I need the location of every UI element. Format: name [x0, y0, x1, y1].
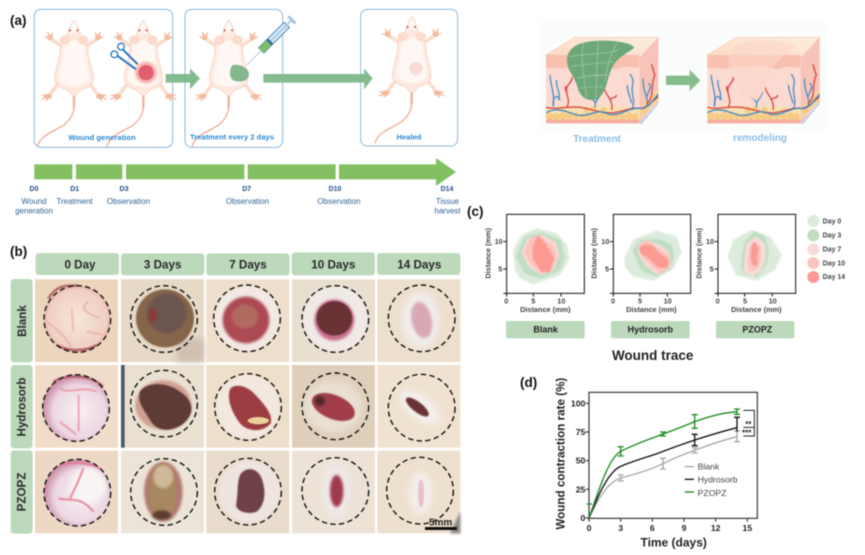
icon: scissors — [111, 43, 138, 69]
legend: Day 7 — [823, 246, 841, 253]
box: treatment — [185, 9, 283, 147]
timeline labels: Observation — [107, 197, 150, 206]
axis ticks and labels: 0 — [716, 296, 720, 305]
group labels — [506, 321, 794, 338]
panel b: wound photo grid — [11, 252, 460, 534]
photo: Hydrosorb 14 days — [377, 365, 460, 448]
timeline labels: Wound — [21, 197, 47, 206]
axis ticks and labels: 10 — [664, 296, 672, 305]
legend: Hydrosorb — [698, 474, 738, 484]
mouse: healed — [375, 17, 444, 143]
axis ticks and labels: 5 — [498, 264, 502, 273]
box: wound generation — [34, 9, 173, 147]
axis ticks and labels: 5 — [710, 264, 714, 273]
row headers — [11, 279, 33, 534]
timeline labels: D3 — [120, 186, 129, 193]
column headers: 3 Days — [144, 258, 181, 271]
axis ticks and labels: 10 — [706, 237, 714, 246]
dashed wound outlines — [43, 285, 455, 526]
tick labels: 3 — [618, 523, 623, 533]
column headers: 7 Days — [229, 258, 267, 271]
group labels: Blank — [533, 324, 558, 334]
tick labels: 0 — [587, 523, 592, 533]
plot: PZOPZ — [718, 214, 796, 293]
axis ticks and labels: Distance (mm) — [731, 305, 782, 314]
timeline labels: generation — [15, 206, 53, 216]
photo: PZOPZ 10 days — [292, 451, 375, 533]
axis title: x: Time (days) — [640, 536, 707, 550]
plot: Hydrosorb — [613, 214, 691, 293]
scale bar — [425, 518, 457, 530]
photo: PZOPZ 0 day — [35, 451, 118, 533]
photo: Blank 7 days — [206, 279, 289, 362]
panel label: (a): (a) — [10, 13, 26, 28]
axis ticks and labels: 10 — [557, 296, 565, 305]
axis ticks and labels: 10 — [769, 296, 777, 305]
timeline labels: Tissue — [436, 197, 460, 206]
scale bar: 5mm — [429, 518, 452, 529]
significance brackets: *** — [742, 428, 752, 437]
mouse: wounded — [107, 20, 176, 147]
skin block: treatment — [546, 37, 658, 124]
caption: healed: Healed — [397, 132, 422, 142]
axis ticks and labels: 10 — [601, 237, 609, 246]
icon: syringe — [243, 16, 296, 68]
axis ticks and labels: 5 — [605, 264, 609, 273]
caption: Wound trace: Wound trace — [612, 348, 694, 363]
axes — [586, 392, 757, 522]
mouse: intact — [37, 20, 107, 147]
arrow: to healed — [263, 68, 373, 89]
panel a right: skin blocks — [540, 20, 827, 132]
legend: Day 0 — [823, 218, 841, 225]
mouse: treated — [192, 20, 261, 147]
caption: Treatment: Treatment — [573, 134, 622, 145]
group labels: PZOPZ — [742, 324, 773, 334]
timeline labels: Observation — [317, 197, 361, 206]
background tint — [540, 20, 827, 132]
panel label: (c): (c) — [467, 204, 484, 219]
axis ticks and labels: Distance (mm) — [626, 305, 677, 314]
timeline arrow — [34, 158, 456, 186]
tick labels: 15 — [743, 523, 752, 533]
axis ticks and labels: 5 — [531, 296, 535, 305]
row headers: PZOPZ — [15, 473, 28, 511]
timeline labels: Treatment — [56, 197, 93, 206]
photo: PZOPZ 3 days — [121, 451, 204, 533]
row headers: Blank — [16, 305, 29, 337]
series: Hydrosorb — [589, 417, 740, 518]
caption: remodeling: remodeling — [733, 133, 787, 144]
caption: wound generation: Wound generation — [68, 133, 136, 142]
axis ticks and labels: 0 — [504, 296, 508, 305]
timeline labels: D10 — [329, 186, 342, 193]
column headers: 0 Day — [64, 259, 96, 272]
legend: Day 3 — [823, 233, 841, 240]
legend: Day 14 — [823, 274, 845, 281]
timeline labels: D14 — [441, 186, 454, 193]
tick labels: 12 — [711, 523, 721, 533]
column headers: 14 Days — [397, 259, 441, 272]
column headers — [36, 252, 460, 275]
axis ticks and labels: 5 — [638, 296, 642, 305]
photo: Blank 14 days — [377, 279, 460, 362]
axis ticks and labels: 5 — [743, 296, 747, 305]
series: PZOPZ — [587, 409, 740, 518]
plot: Blank — [507, 214, 584, 293]
legend — [807, 215, 845, 283]
timeline labels: D7 — [242, 186, 251, 193]
tick labels — [571, 398, 752, 533]
timeline labels: harvest — [434, 206, 461, 216]
legend — [685, 462, 738, 498]
significance brackets: ** — [745, 420, 752, 429]
axis ticks and labels: 10 — [495, 237, 503, 246]
axis ticks and labels: Distance (mm) — [520, 305, 571, 314]
row headers: Hydrosorb — [15, 378, 28, 436]
tick labels: 9 — [682, 523, 687, 533]
tick labels: 0 — [581, 513, 586, 523]
tick labels: 25 — [576, 484, 586, 494]
photo: Hydrosorb 0 day — [35, 365, 118, 448]
axis ticks and labels: Distance (mm) — [695, 228, 704, 279]
photo: Hydrosorb 3 days — [121, 365, 204, 448]
tick labels: 75 — [576, 427, 586, 437]
photo: Hydrosorb 10 days — [292, 365, 375, 448]
series: Blank — [589, 431, 740, 518]
timeline labels: D0 — [30, 186, 39, 193]
skin block: remodeling — [707, 37, 820, 124]
arrow: to treatment — [166, 68, 200, 89]
photo: PZOPZ 7 days — [206, 451, 289, 533]
tick labels: 6 — [650, 523, 655, 533]
panel label: (b): (b) — [10, 244, 27, 259]
legend: PZOPZ — [698, 488, 727, 498]
group labels: Hydrosorb — [628, 324, 674, 334]
axis title: y: Wound contraction rate (%) — [555, 378, 568, 530]
legend: Blank — [698, 462, 720, 472]
column headers: 10 Days — [311, 258, 355, 271]
box: healed — [361, 9, 458, 146]
arrow: treatment to remodeling — [666, 70, 700, 91]
photo: PZOPZ 14 days — [377, 451, 460, 533]
axis ticks and labels — [483, 228, 782, 314]
panel c: wound trace — [483, 214, 845, 338]
panel a: mouse treatment scheme — [34, 9, 458, 147]
axis ticks and labels: Distance (mm) — [483, 228, 492, 279]
axis ticks and labels: Distance (mm) — [590, 228, 599, 279]
timeline labels: D1 — [70, 186, 79, 193]
caption: treatment: Treatment every 2 days — [190, 132, 274, 142]
timeline labels: Observation — [226, 197, 269, 206]
legend: Day 10 — [823, 260, 845, 267]
tick labels: 50 — [576, 456, 586, 466]
photo: Blank 10 days — [292, 279, 375, 362]
axis ticks and labels: 0 — [611, 296, 615, 305]
photo: Hydrosorb 7 days — [206, 365, 289, 448]
tick labels: 100 — [571, 398, 586, 408]
panel label: (d): (d) — [520, 375, 537, 390]
photo: Blank 3 days — [121, 279, 204, 362]
significance brackets — [742, 410, 754, 437]
photo: Blank 0 day — [35, 279, 118, 362]
panel d: contraction chart — [555, 378, 757, 550]
timeline labels — [15, 186, 461, 216]
